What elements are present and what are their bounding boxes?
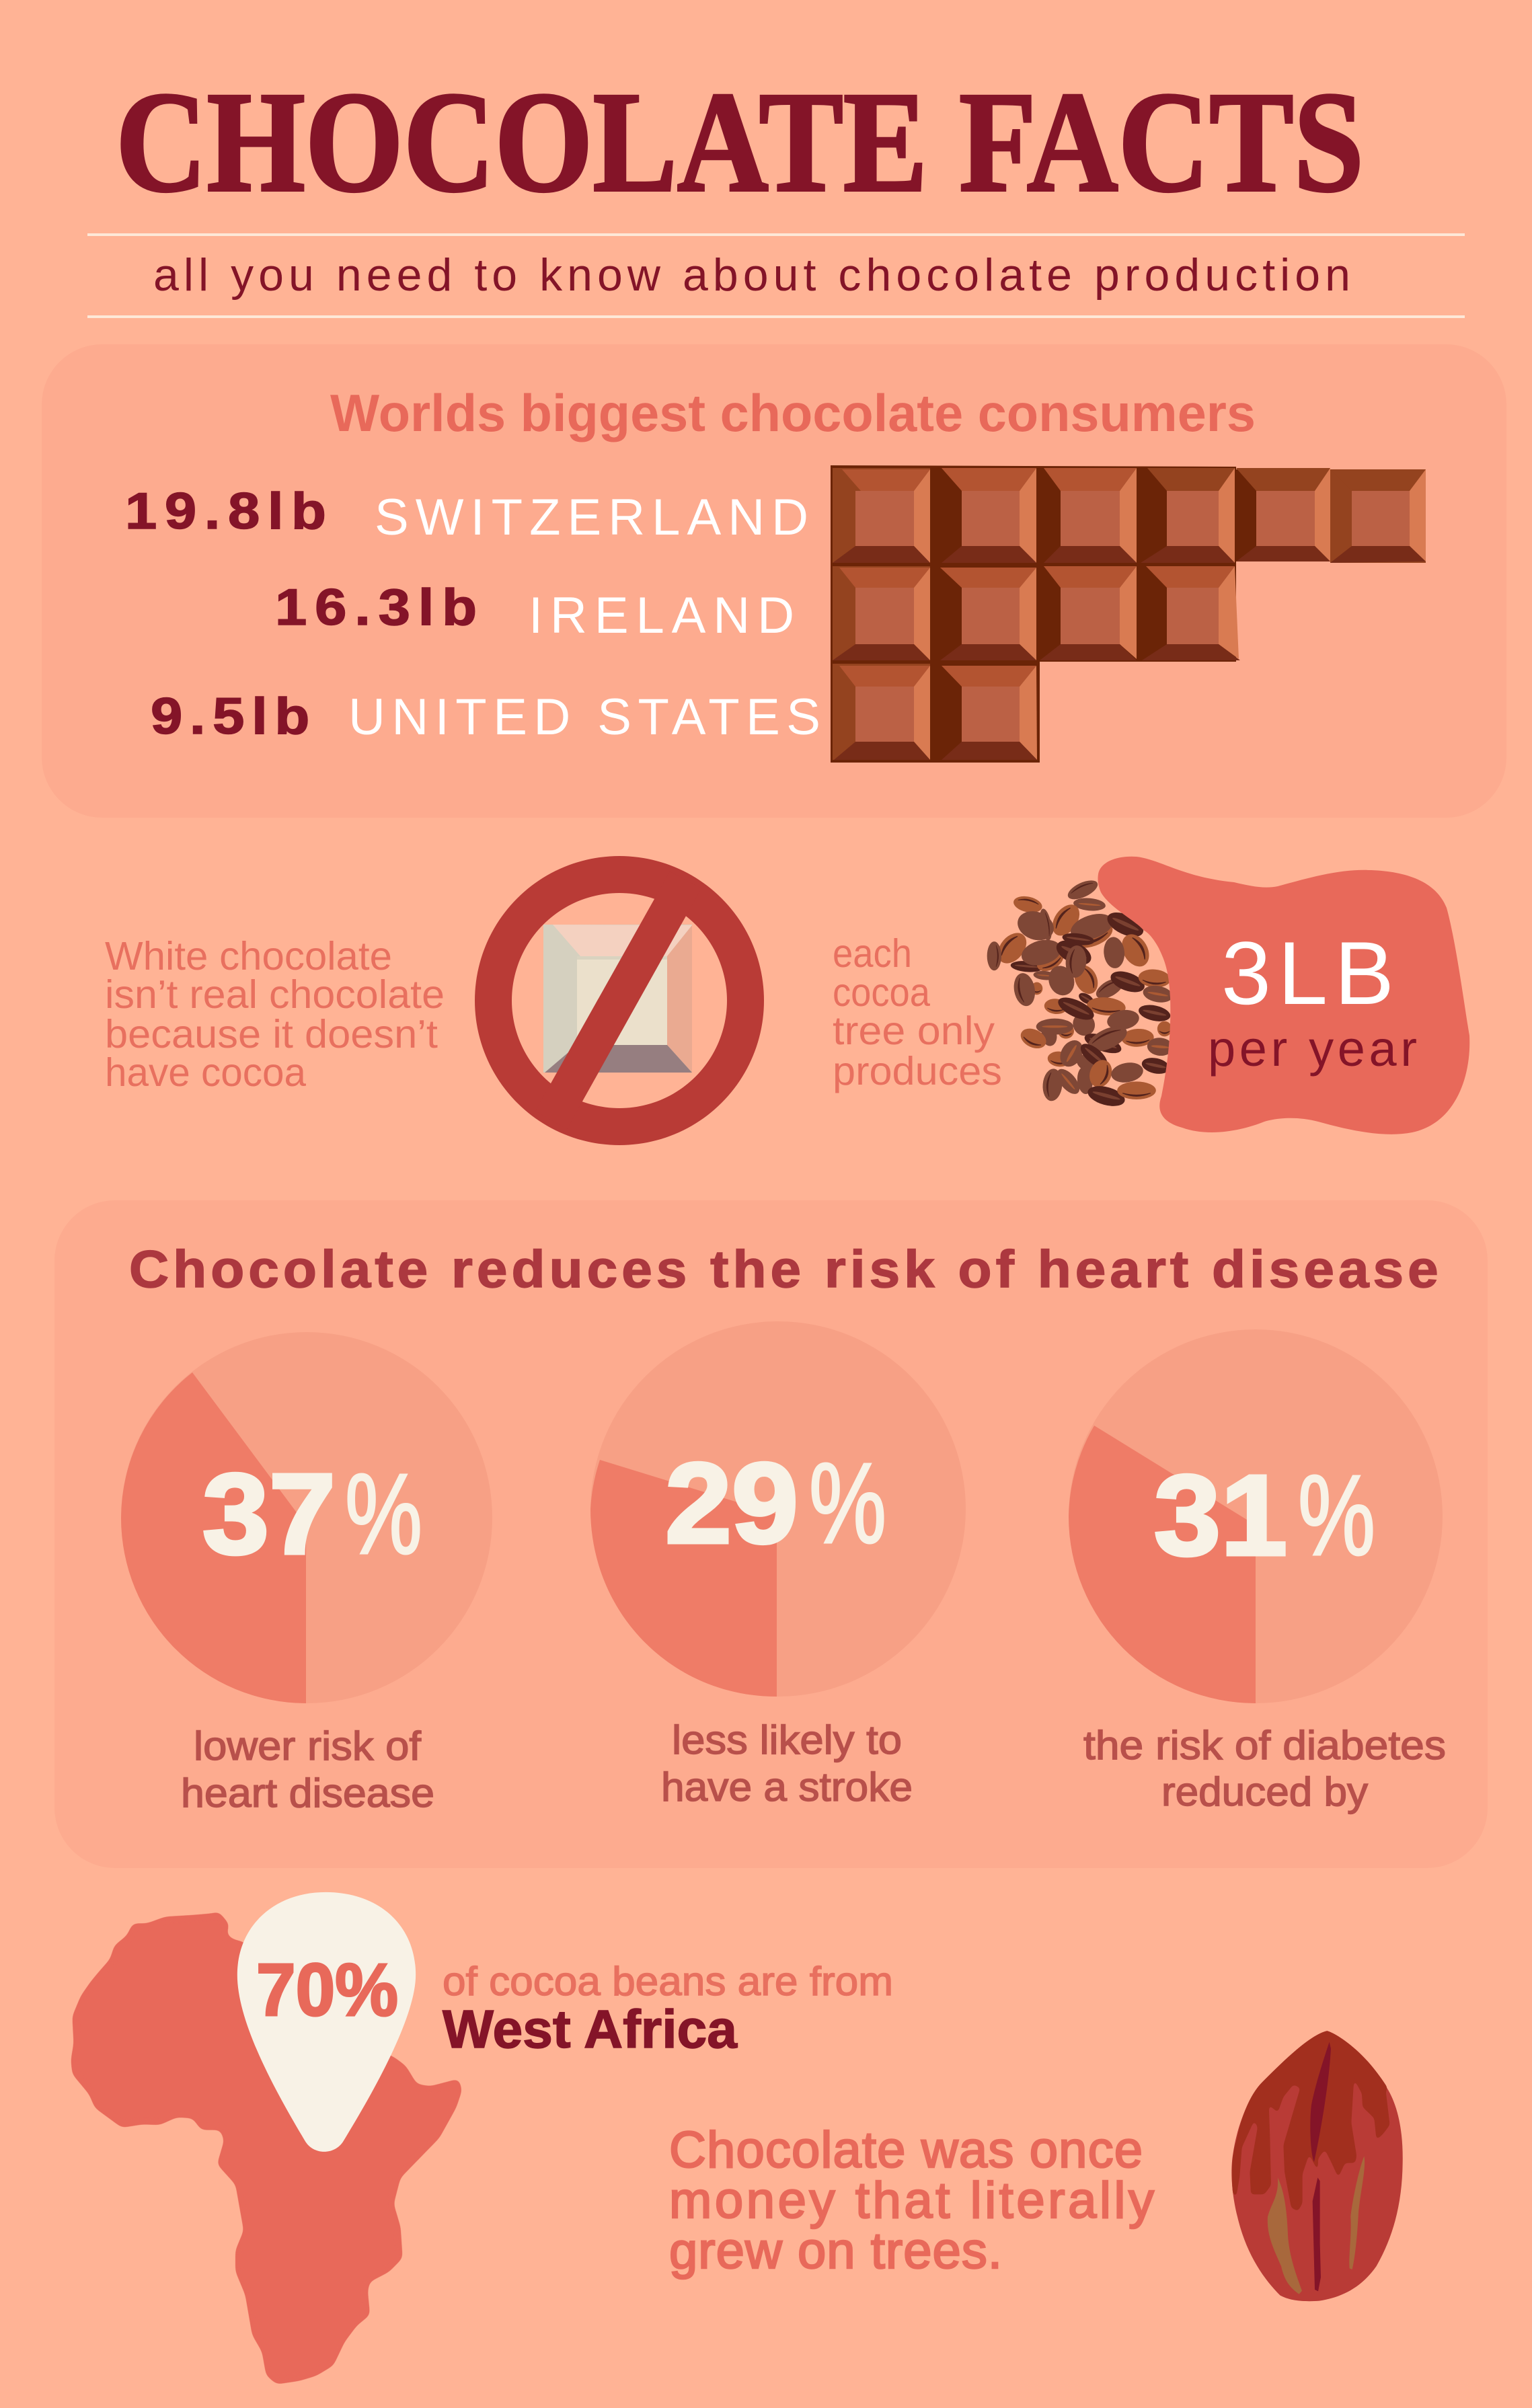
label: Switzerland: SWITZERLAND <box>375 489 808 546</box>
text: cocoa tree yield: cocoa <box>833 970 930 1015</box>
amount: Switzerland: 19.8lb <box>125 483 326 540</box>
text: cocoa beans origin: of cocoa beans are from <box>443 1959 893 2004</box>
text: white chocolate fact: because it doesn’t <box>105 1012 438 1056</box>
row 2 <box>833 566 1240 660</box>
text: money on trees: money that literally <box>669 2172 1154 2229</box>
label: 31% <box>1083 1723 1446 1814</box>
label: 37%: heart disease <box>181 1771 434 1816</box>
pie chart: 31%: 31 <box>1154 1452 1287 1580</box>
label: Ireland: IRELAND <box>529 587 794 644</box>
amount: Ireland: 16.3lb <box>275 579 477 636</box>
label: 29%: have a stroke <box>661 1764 913 1810</box>
subtitle: all you need to know about chocolate production <box>153 249 1350 301</box>
text: cocoa beans origin: West Africa <box>443 1999 738 2059</box>
label: 37%: lower risk of <box>194 1723 421 1769</box>
text: cocoa tree yield <box>833 931 1002 1093</box>
text: money on trees <box>669 2122 1154 2280</box>
row 3 <box>833 664 1037 760</box>
text: cocoa tree yield: each <box>833 931 912 976</box>
label: United States: UNITED STATES <box>348 689 820 746</box>
pie chart: 37%: 37 <box>202 1450 336 1578</box>
text: white chocolate fact: isn’t real chocolate <box>105 972 445 1017</box>
amount: United States: 9.5lb <box>151 688 309 745</box>
icon: cocoa pod <box>1231 2031 1403 2301</box>
heading: heart disease: Chocolate reduces the risk of heart disease <box>129 1240 1439 1298</box>
label: 37% <box>181 1723 434 1816</box>
label: per year: per year <box>1208 1021 1417 1077</box>
label: 31%: the risk of diabetes <box>1083 1723 1446 1768</box>
text: money on trees: grew on trees. <box>669 2222 1002 2280</box>
text: money on trees: Chocolate was once <box>669 2122 1143 2179</box>
panel: heart disease <box>54 1200 1488 1868</box>
text: white chocolate fact <box>105 934 445 1095</box>
chocolate bar pictogram <box>831 465 1426 763</box>
text: cocoa beans origin <box>443 1959 893 2059</box>
pie chart: 37% <box>121 1332 492 1703</box>
label: 29% <box>661 1717 913 1810</box>
pie chart: 31% <box>1069 1329 1443 1703</box>
label: 31%: reduced by <box>1161 1769 1368 1814</box>
map: Africa with location pin <box>72 1892 461 2383</box>
text: cocoa tree yield: tree only <box>833 1009 995 1053</box>
label: 29%: less likely to <box>672 1717 902 1762</box>
pie chart: 29% <box>590 1321 966 1697</box>
pie chart: 29%: % <box>809 1440 886 1567</box>
text: white chocolate fact: White chocolate <box>105 934 392 978</box>
text: white chocolate fact: have cocoa <box>105 1050 306 1095</box>
row 1 <box>833 468 1426 563</box>
icon: white chocolate prohibited <box>475 856 764 1145</box>
value: 70%: 70% <box>256 1949 398 2031</box>
heading: consumers: Worlds biggest chocolate consumers <box>330 383 1256 442</box>
title: CHOCOLATE FACTS <box>116 63 1364 222</box>
panel: biggest consumers <box>42 344 1506 818</box>
text: cocoa tree yield: produces <box>833 1049 1002 1093</box>
pin <box>237 1892 416 2152</box>
pie chart: 31%: % <box>1298 1452 1375 1580</box>
icon: pile of cocoa beans <box>987 877 1174 1110</box>
callout: 3LB per year <box>1098 857 1469 1134</box>
value: 3LB: 3LB <box>1221 924 1394 1023</box>
pie chart: 29%: 29 <box>665 1440 798 1567</box>
pie chart: 37%: % <box>345 1450 422 1578</box>
